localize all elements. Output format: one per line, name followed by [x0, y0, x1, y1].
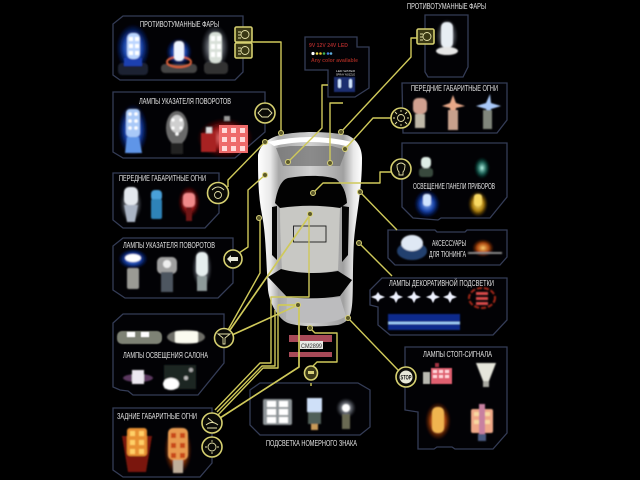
bulb: star white: [336, 398, 356, 429]
car body: [258, 132, 362, 326]
nozzle label 2: SPRAY NOZZLE: [336, 72, 355, 76]
red ring lamp: [469, 288, 495, 308]
panel: dashboard lights: [402, 143, 507, 220]
bulb: yellow: [468, 191, 488, 217]
left side window: [272, 206, 277, 260]
pink bulb: [471, 404, 493, 441]
connector end nodes: [256, 130, 362, 330]
bulb: panel with wires: [163, 365, 196, 390]
bulb: blue fog: [116, 24, 150, 75]
icon: plate light: [304, 366, 318, 380]
nozzle photo: [334, 77, 355, 92]
panel: front fog lights: [113, 16, 243, 80]
panel: licence plate light: [250, 383, 370, 435]
bulb: warm star: [442, 95, 465, 130]
heading: fog lights right: ПРОТИВОТУМАННЫЕ ФАРЫ: [407, 1, 486, 11]
panel: brake lights: [405, 347, 507, 449]
bulb: white small: [419, 157, 433, 177]
heading: turn signals: ЛАМПЫ УКАЗАТЕЛЯ ПОВОРОТОВ: [139, 96, 231, 106]
rear plate: [300, 341, 323, 349]
icon: front side light right: [391, 108, 411, 128]
car bonnet shading: [276, 146, 346, 166]
bulb: teal: [474, 157, 490, 179]
bulb: white square: [263, 399, 292, 425]
bulb: warm: [413, 98, 427, 128]
heading: fog lights: ПРОТИВОТУМАННЫЕ ФАРЫ: [140, 19, 219, 29]
icon: interior light: [214, 328, 234, 348]
lamp: orange star: [468, 239, 502, 257]
panel: interior lamps: [113, 314, 224, 395]
red LED panel: [431, 363, 452, 384]
heading: accessories: АКСЕССУАРЫ: [432, 238, 466, 248]
heading: decorative lights: ЛАМПЫ ДЕКОРАТИВНОЙ ПОДСВЕТКИ: [389, 277, 494, 288]
orange bulb: [425, 402, 451, 440]
bulb: festoon purple: [123, 370, 153, 384]
panel: front side lights left: [113, 173, 219, 228]
voltage label: 9V 12V 24V LED: [309, 43, 348, 49]
icon: fog light right: [417, 29, 434, 44]
colour dots: [311, 52, 332, 55]
rear window: [268, 269, 352, 298]
small lamp: [423, 372, 430, 384]
icon: stop: [396, 367, 416, 387]
right side window: [342, 206, 349, 262]
bulb: gray turn: [166, 111, 188, 154]
icon: front side light left: [208, 182, 228, 204]
bulb: white T10: [192, 248, 212, 291]
bulb: festoon white: [167, 330, 205, 344]
panel: LED colours card: [305, 37, 369, 97]
icon: turn signal: [255, 103, 275, 123]
icon: rear turn: [224, 250, 242, 268]
bulb: orange: [164, 425, 192, 475]
bulb: red-orange: [122, 428, 152, 472]
bonnet highlight: [268, 137, 352, 146]
heading: interior lamps: ЛАМПЫ ОСВЕЩЕНИЯ САЛОНА: [123, 350, 208, 360]
bulb: white with base: [436, 19, 458, 55]
bulb: blue: [414, 190, 440, 218]
icon: rear side light: [202, 413, 222, 433]
icon: reverse light: [202, 437, 222, 457]
rear deck: [286, 297, 346, 323]
bulb: red: [178, 186, 200, 221]
blue light strip: [388, 314, 460, 330]
bulb: blue: [151, 190, 162, 219]
rear plate bars: [289, 335, 332, 357]
heading: brake lights: ЛАМПЫ СТОП-СИГНАЛА: [423, 349, 492, 359]
icon: stop: STOP: [400, 376, 412, 382]
icon: fog light left bottom: [235, 43, 252, 58]
nozzle label: LED WATER: [336, 69, 356, 73]
icon: fog light left top: [235, 27, 252, 42]
bulb: gray cluster: [157, 257, 177, 292]
heading: licence plate light: ПОДСВЕТКА НОМЕРНОГО ЗНАКА: [266, 438, 357, 448]
panel: tuning accessories: [388, 230, 507, 265]
heading: dashboard lights: ОСВЕЩЕНИЕ ПАНЕЛИ ПРИБОРОВ: [413, 181, 495, 191]
panel: turn signal lamps middle: [113, 238, 233, 298]
bulb: red cluster: [197, 116, 253, 158]
heading: rear side lights: ЗАДНИЕ ГАБАРИТНЫЕ ОГНИ: [117, 411, 197, 421]
heading: turn signals 2: ЛАМПЫ УКАЗАТЕЛЯ ПОВОРОТОВ: [123, 240, 215, 250]
bulb: white fog: [201, 25, 229, 74]
roof rectangle: [294, 226, 326, 242]
panel: turn signal lamps top: [113, 92, 265, 158]
roof: [280, 206, 340, 273]
any colour label: Any color available: [311, 58, 358, 64]
connector lines: [215, 38, 417, 418]
icon: dashboard light: [391, 159, 411, 179]
panel: fog lights right: [425, 15, 468, 77]
bulb: festoon gray: [117, 331, 162, 344]
heading: for tuning: ДЛЯ ТЮНИНГА: [429, 249, 466, 259]
heading: front side lights: ПЕРЕДНИЕ ГАБАРИТНЫЕ ОГНИ: [119, 173, 206, 183]
bulb: T10 white: [307, 398, 322, 430]
bulb: white fog with orange ring: [161, 38, 197, 73]
heading: front side lights right: ПЕРЕДНИЕ ГАБАРИТНЫЕ ОГНИ: [411, 83, 498, 93]
lamp: blue puck: [397, 235, 427, 260]
windscreen: [275, 176, 347, 208]
plate text: CM2899: [301, 343, 322, 350]
bulb: white: [120, 186, 142, 222]
panel: decorative lights: [370, 277, 507, 335]
bulb: blue star: [476, 94, 501, 129]
car: [258, 132, 362, 357]
bulb: star white: [118, 249, 148, 289]
white cone bulb: [476, 363, 496, 387]
panel: front side lights right: [402, 83, 507, 133]
panel: rear side lights: [113, 408, 212, 477]
red LED panel: [219, 125, 248, 153]
white LED row: [371, 291, 457, 303]
bulb: blue turn: [118, 104, 148, 156]
